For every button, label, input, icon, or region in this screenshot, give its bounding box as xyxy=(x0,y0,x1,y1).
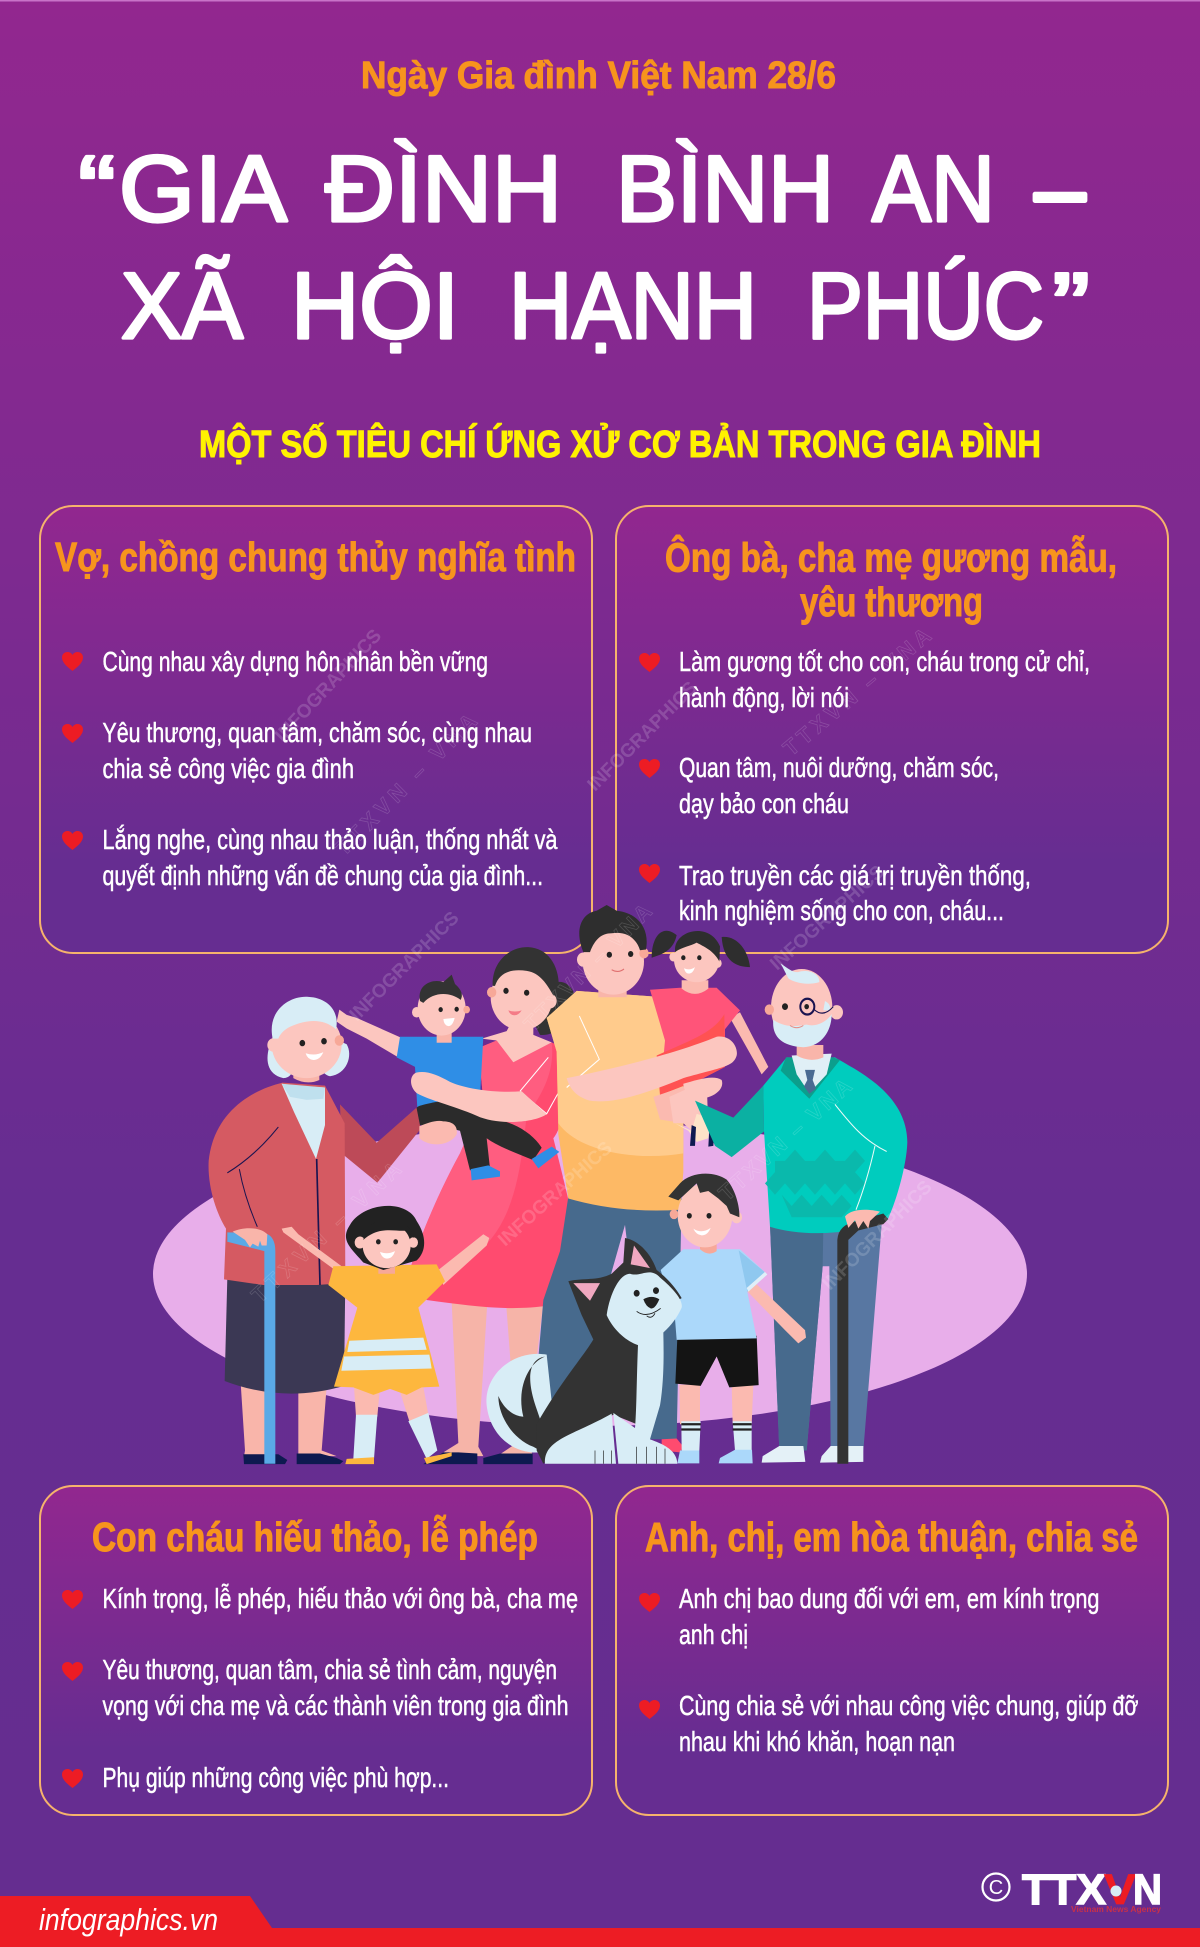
list item 1 xyxy=(62,646,488,677)
list item 1 xyxy=(639,646,1090,713)
father holding girl xyxy=(533,905,768,1452)
footer: red bar and site tab xyxy=(0,1896,1200,1947)
title line 2: PHÚC xyxy=(807,253,1044,358)
girl in yellow dress xyxy=(282,1206,489,1464)
illustration background ellipse xyxy=(153,1122,1027,1426)
panel: grandparents and parents xyxy=(616,506,1168,953)
list item 3 xyxy=(639,860,1031,926)
title line 2: ” xyxy=(1052,253,1090,358)
list item 2: chia sẻ công việc gia đình xyxy=(102,753,354,784)
grandmother xyxy=(209,997,421,1464)
cane and hand xyxy=(227,1232,275,1464)
watermarks: TTXVN – VNA xyxy=(519,899,657,1037)
logo: TTXVN: V xyxy=(1104,1866,1136,1914)
title line 1: GIA xyxy=(119,136,287,241)
watermarks: TTXVN – VNA xyxy=(330,708,482,861)
list item 3 xyxy=(62,824,558,891)
title line 2: XÃ xyxy=(121,253,243,358)
panel heading xyxy=(665,534,1117,625)
small heading: Vietnamese Family Day: Ngày Gia đình Việt Nam 28/6 xyxy=(361,55,836,97)
list item 1: anh chị xyxy=(679,1619,748,1650)
mother holding baby xyxy=(337,947,589,1464)
father's arm and hand xyxy=(567,1037,737,1101)
list item 3 xyxy=(62,1762,449,1793)
watermarks: TTXVN – VNA xyxy=(714,1073,857,1206)
list item 1 xyxy=(639,1583,1100,1650)
list item 2 xyxy=(62,717,532,784)
list item 3: Phụ giúp những công việc phù hợp... xyxy=(102,1762,449,1793)
list item 2: Quan tâm, nuôi dưỡng, chăm sóc, xyxy=(679,752,999,783)
dog xyxy=(486,1238,682,1464)
title line 1: “ xyxy=(78,136,116,241)
main title xyxy=(78,136,1090,358)
list item 2: nhau khi khó khăn, hoạn nạn xyxy=(679,1726,955,1757)
title line 1: ĐÌNH xyxy=(325,136,562,241)
list item 2 xyxy=(639,752,999,819)
list item 2: vọng với cha mẹ và các thành viên trong gia đình xyxy=(102,1690,568,1721)
title line 1 xyxy=(78,136,1086,241)
watermarks: INFOGRAPHICS xyxy=(819,1177,937,1295)
title line 2: HẠNH xyxy=(509,253,757,358)
title line 1: BÌNH xyxy=(616,136,834,241)
list item 3: Trao truyền các giá trị truyền thống, xyxy=(679,860,1031,891)
list item 3: kinh nghiệm sống cho con, cháu... xyxy=(679,895,1004,926)
grandfather xyxy=(695,963,907,1464)
list item 1: hành động, lời nói xyxy=(679,682,849,713)
watermarks: TTXVN – VNA xyxy=(778,623,936,761)
logo: TTXVN xyxy=(982,1866,1162,1914)
list item 1: Làm gương tốt cho con, cháu trong cử chỉ, xyxy=(679,646,1090,677)
title line 1: AN xyxy=(872,136,995,241)
logo: TTXVN: N xyxy=(1133,1866,1162,1914)
logo: TTXVN: C xyxy=(989,1877,1003,1899)
illustration: family xyxy=(209,905,907,1464)
cane and hand xyxy=(837,1214,888,1464)
list item 2: dạy bảo con cháu xyxy=(679,788,849,819)
mother's arm xyxy=(411,1072,547,1122)
logo: TTXVN: Vietnam News Agency xyxy=(1071,1904,1161,1914)
watermarks: INFOGRAPHICS xyxy=(494,1138,617,1251)
watermarks xyxy=(246,623,937,1308)
watermarks: INFOGRAPHICS xyxy=(584,678,702,796)
baby xyxy=(337,1010,401,1057)
watermarks: INFOGRAPHICS xyxy=(271,626,386,746)
subtitle: MỘT SỐ TIÊU CHÍ ỨNG XỬ CƠ BẢN TRONG GIA ĐÌNH xyxy=(199,421,1041,466)
title line 1: – xyxy=(1035,136,1086,241)
list item 3: quyết định những vấn đề chung của gia đình... xyxy=(102,860,543,891)
panel: spouses xyxy=(40,506,592,953)
list item 2 xyxy=(62,1654,568,1721)
panel heading: Vợ, chồng chung thủy nghĩa tình xyxy=(55,534,576,580)
logo: TTXVN: TTX xyxy=(1022,1866,1106,1914)
title line 2: HỘI xyxy=(291,253,459,358)
list item 1: Cùng nhau xây dựng hôn nhân bền vững xyxy=(102,646,488,677)
watermarks: INFOGRAPHICS xyxy=(346,908,464,1026)
panel heading: yêu thương xyxy=(800,579,983,625)
list item 1: Kính trọng, lễ phép, hiếu thảo với ông bà, cha mẹ xyxy=(102,1583,578,1614)
site name: infographics.vn xyxy=(39,1902,218,1937)
panel: siblings xyxy=(616,1486,1168,1815)
list item 2 xyxy=(639,1690,1138,1757)
list item 2: Yêu thương, quan tâm, chia sẻ tình cảm, nguyện xyxy=(102,1654,557,1685)
title line 2 xyxy=(121,253,1090,358)
watermarks: TTXVN – VNA xyxy=(246,1156,406,1308)
list item 2: Yêu thương, quan tâm, chăm sóc, cùng nhau xyxy=(102,717,532,748)
girl held by father xyxy=(730,1012,768,1074)
panel: children and grandchildren xyxy=(40,1486,592,1815)
panel heading: Con cháu hiếu thảo, lễ phép xyxy=(92,1514,538,1560)
list item 3: Lắng nghe, cùng nhau thảo luận, thống nhất và xyxy=(102,824,558,855)
watermarks: INFOGRAPHICS xyxy=(766,862,889,975)
boy in blue shirt xyxy=(661,1174,806,1463)
